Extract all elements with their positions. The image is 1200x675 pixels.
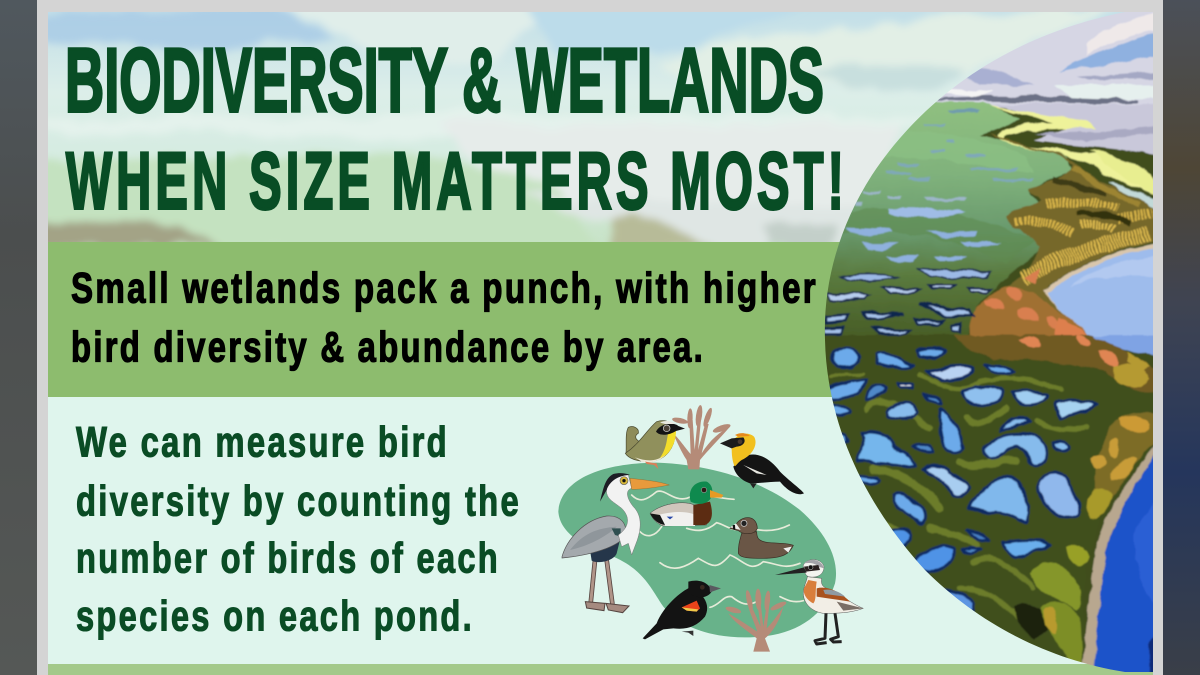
bottom green strip [48, 664, 1153, 675]
pale lower panel background [48, 397, 1088, 664]
common yellowthroat [625, 421, 685, 469]
pond [558, 463, 836, 637]
wilson's phalarope [775, 560, 863, 644]
pond bird illustration [558, 405, 863, 652]
summary text: Small wetlands pack a punch, with higher [71, 264, 818, 312]
great blue heron [562, 473, 669, 613]
cattail lower [725, 589, 787, 652]
tree tops [1017, 167, 1153, 278]
explanation text [76, 418, 521, 640]
summary text: bird diversity & abundance by area. [71, 324, 705, 372]
sky painting header background [48, 12, 1124, 242]
explanation text: We can measure bird [76, 418, 449, 466]
summary text [71, 264, 818, 372]
red-winged blackbird [643, 581, 721, 639]
mallard [650, 481, 723, 526]
yellow-headed blackbird [720, 433, 804, 494]
cattail upper [672, 405, 731, 469]
small ponds in perspective [823, 109, 1033, 334]
pied-billed grebe [730, 518, 793, 558]
circular wetland painting [824, 12, 1153, 672]
explanation text: diversity by counting the [76, 478, 521, 526]
blurred photo backdrop right [1163, 0, 1200, 675]
green summary band background [48, 242, 848, 397]
explanation text: number of birds of each [76, 534, 500, 582]
explanation text: species on each pond. [76, 592, 474, 640]
olive brush streaks between ponds [830, 373, 1087, 618]
painting lower part drawn in zoom coordinates [813, 335, 1157, 675]
painting upper part drawn in zoom coordinates [813, 0, 1157, 343]
water ripples [632, 491, 803, 607]
blurred photo backdrop left [0, 0, 37, 675]
